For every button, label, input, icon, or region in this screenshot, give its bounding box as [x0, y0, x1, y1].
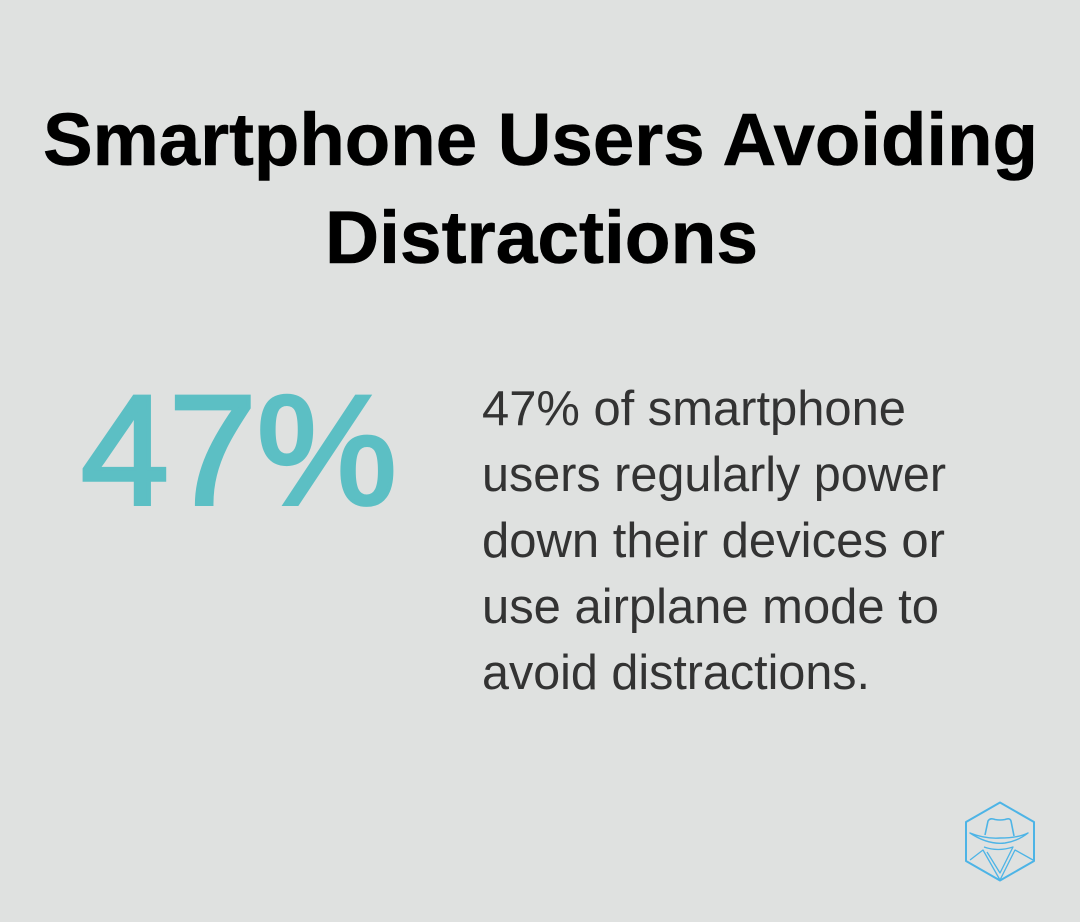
description text: 47% of smartphone: [482, 382, 906, 436]
title: Distractions: [325, 196, 758, 279]
description text: [482, 382, 946, 700]
big stat: 47%: 47%: [81, 364, 397, 538]
description text: use airplane mode to: [482, 580, 939, 634]
description text: down their devices or: [482, 514, 945, 568]
description text: users regularly power: [482, 448, 946, 502]
title: [43, 98, 1038, 279]
description text: avoid distractions.: [482, 646, 870, 700]
icon: hexagon spy logo: [966, 802, 1034, 880]
title: Smartphone Users Avoiding: [43, 98, 1038, 181]
